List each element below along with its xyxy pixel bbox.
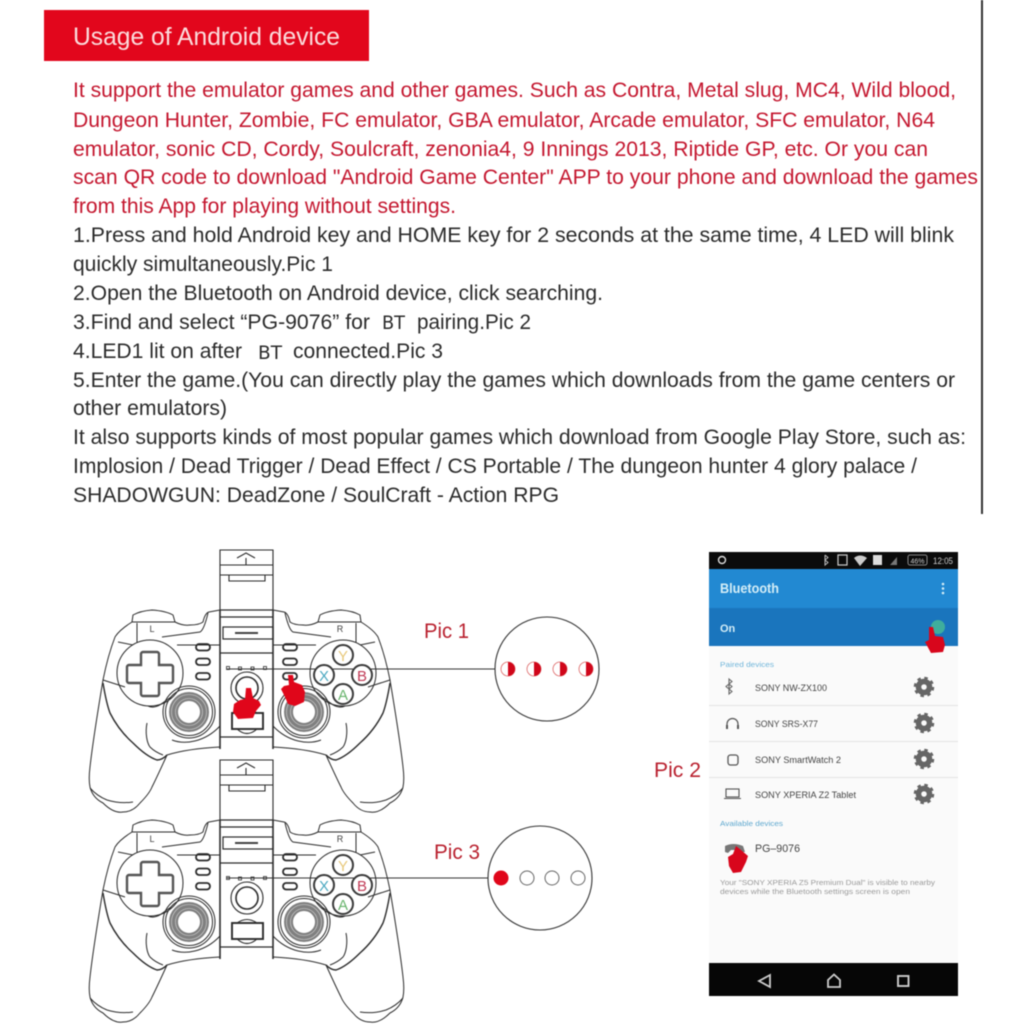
steps text block: 4.LED1 lit on after	[73, 340, 242, 363]
controller 2 face buttons: B	[357, 878, 367, 895]
intro text block in red: scan QR code to download "Android Game Center" APP to your phone and download the games	[73, 166, 978, 189]
Bluetooth On row with toggle: On	[720, 623, 736, 635]
device row: SONY NW-ZX100	[726, 678, 933, 696]
controller 1 face buttons: A	[338, 687, 348, 704]
controller 1 face buttons: X	[319, 668, 329, 685]
header banner	[44, 10, 369, 61]
steps text block: BT	[382, 312, 405, 334]
steps text block: 3.Find and select “PG-9076” for	[73, 311, 370, 334]
Pic 2 label: Pic 2	[654, 759, 701, 782]
controller 1 shoulder labels	[149, 624, 344, 634]
controller 1 face buttons	[314, 645, 372, 704]
Pic 3 callout	[227, 826, 592, 930]
status bar: 46%	[910, 558, 925, 566]
app bar: Bluetooth	[720, 581, 779, 596]
steps text block: connected.Pic 3	[293, 340, 443, 363]
device row: SONY NW-ZX100: SONY NW-ZX100	[755, 683, 827, 693]
controller 1 shoulder labels: R	[337, 624, 344, 634]
controller 2 face buttons: A	[338, 897, 348, 914]
hand pointer on PG-9076	[728, 846, 748, 873]
Pic 1 callout	[227, 617, 599, 721]
device row: SONY XPERIA Z2 Tablet	[724, 785, 933, 803]
controller 2 face buttons	[314, 855, 372, 914]
device row: PG-9076	[725, 843, 800, 855]
device row: SONY SmartWatch 2	[728, 750, 933, 768]
controller 2 face buttons: Y	[338, 858, 348, 875]
phone screenshot: Bluetooth settings	[709, 552, 958, 996]
controller 2 shoulder labels: L	[149, 834, 155, 844]
status bar	[709, 552, 958, 569]
controller 1 with hand markers	[89, 550, 404, 812]
intro text block in red	[73, 79, 978, 218]
steps text block: quickly simultaneously.Pic 1	[73, 253, 333, 276]
steps text block: 2.Open the Bluetooth on Android device, click searching.	[73, 282, 603, 305]
intro text block in red: emulator, sonic CD, Cordy, Soulcraft, zenonia4, 9 Innings 2013, Riptide GP, etc. Or you can	[73, 138, 928, 161]
steps text block: 5.Enter the game.(You can directly play the games which downloads from the game centers or	[73, 369, 955, 392]
intro text block in red: from this App for playing without settings.	[73, 195, 456, 218]
device row: SONY SRS-X77	[726, 714, 933, 732]
steps text block: pairing.Pic 2	[417, 311, 531, 334]
steps text block	[73, 224, 966, 507]
right border line	[981, 0, 983, 514]
available devices heading: Available devices	[720, 819, 783, 828]
controller 1 face buttons: B	[357, 668, 367, 685]
controller 2 face buttons: X	[319, 878, 329, 895]
hand pointer on toggle	[925, 627, 945, 653]
steps text block: 1.Press and hold Android key and HOME key for 2 seconds at the same time, 4 LED will blink	[73, 224, 954, 247]
header title: Usage of Android device	[73, 23, 340, 51]
visibility note: devices while the Bluetooth settings screen is open	[720, 887, 910, 896]
hand pointer on Android key	[233, 688, 261, 719]
steps text block: SHADOWGUN: DeadZone / SoulCraft - Action RPG	[73, 484, 559, 507]
controller 2	[89, 760, 404, 1022]
status bar: 12:05	[933, 556, 953, 566]
hand pointer on HOME key	[281, 675, 305, 706]
paired devices heading: Paired devices	[720, 660, 774, 669]
steps text block: other emulators)	[73, 397, 227, 420]
device row: PG-9076: PG–9076	[755, 843, 800, 855]
controller 1 face buttons: Y	[338, 648, 348, 665]
intro text block in red: Dungeon Hunter, Zombie, FC emulator, GBA emulator, Arcade emulator, SFC emulator, N64	[73, 109, 935, 132]
Bluetooth On row with toggle	[709, 608, 958, 646]
steps text block: Implosion / Dead Trigger / Dead Effect / CS Portable / The dungeon hunter 4 glory palace /	[73, 455, 917, 478]
LED magnifier: 4 blinking LEDs	[495, 617, 599, 721]
LED magnifier: LED1 lit	[488, 826, 592, 930]
controller 2 shoulder labels: R	[337, 834, 344, 844]
steps text block: BT	[258, 342, 282, 364]
controller 1 shoulder labels: L	[149, 624, 155, 634]
Pic 1 label: Pic 1	[424, 620, 469, 643]
device row: SONY SmartWatch 2: SONY SmartWatch 2	[755, 755, 841, 765]
visibility note: Your "SONY XPERIA Z5 Premium Dual" is visible to nearby	[720, 878, 935, 887]
navigation bar	[709, 963, 958, 996]
visibility note	[720, 878, 935, 896]
device row: SONY SRS-X77: SONY SRS-X77	[755, 719, 818, 729]
Pic 3 label: Pic 3	[434, 841, 480, 864]
app bar	[709, 569, 958, 608]
device row: SONY XPERIA Z2 Tablet: SONY XPERIA Z2 Tablet	[755, 790, 857, 800]
controller 2 shoulder labels	[149, 834, 344, 844]
intro text block in red: It support the emulator games and other games. Such as Contra, Metal slug, MC4, Wild blood,	[73, 79, 956, 102]
steps text block: It also supports kinds of most popular games which download from Google Play Store, such as:	[73, 426, 966, 449]
